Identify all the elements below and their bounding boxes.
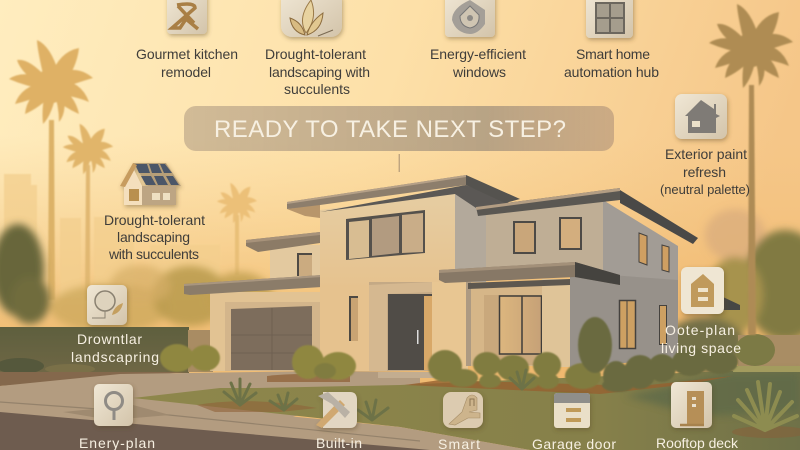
garage wing xyxy=(184,232,336,371)
right palm tree xyxy=(709,4,793,335)
background trees xyxy=(0,209,800,373)
icon: tan house xyxy=(681,267,724,314)
item: built-in xyxy=(316,392,362,450)
upper roof xyxy=(287,175,520,218)
item: open-plan living space: living space xyxy=(661,340,741,356)
agave plants xyxy=(224,370,797,430)
item: solar house landscaping: Drought-tolerant xyxy=(104,212,205,228)
item: rooftop deck xyxy=(656,382,739,450)
item: gourmet kitchen remodel xyxy=(136,0,238,80)
item: energy-efficient windows xyxy=(430,0,526,80)
item: gourmet kitchen remodel: remodel xyxy=(161,64,211,80)
hedge xyxy=(0,327,800,386)
item: smart home automation hub: Smart home xyxy=(576,46,650,62)
item: droughtlar landscaping xyxy=(71,285,159,365)
item: droughtlar landscaping: Drowntlar xyxy=(77,331,142,347)
icon: grey house xyxy=(675,94,727,139)
item: garage door xyxy=(532,393,616,450)
item: drought-tolerant landscaping: landscaping with xyxy=(269,64,370,80)
right wing roof xyxy=(476,188,698,244)
icon: window xyxy=(586,0,633,38)
icon: circle and leaf xyxy=(87,285,127,325)
icon: succulent leaves xyxy=(281,0,342,37)
wing windows xyxy=(513,217,669,348)
item: smart home automation hub xyxy=(564,0,659,80)
icon: door xyxy=(671,382,712,428)
title banner: READY TO TAKE NEXT STEP? xyxy=(214,116,566,143)
item: solar house landscaping xyxy=(104,163,205,262)
icon: kitchen xyxy=(167,0,207,34)
item: exterior paint refresh: (neutral palette) xyxy=(660,182,750,197)
title banner xyxy=(184,106,614,151)
icon: hammer xyxy=(316,392,357,428)
item: solar house landscaping: with succulents xyxy=(108,246,199,262)
palm trees left xyxy=(9,40,257,300)
item: energy-efficient windows: Energy-efficient xyxy=(430,46,526,62)
item: exterior paint refresh xyxy=(660,94,750,197)
item: gourmet kitchen remodel: Gourmet kitchen xyxy=(136,46,238,62)
item: exterior paint refresh: refresh xyxy=(683,164,726,180)
icon: grey droplet ring xyxy=(445,0,495,37)
small rear roof xyxy=(723,297,740,310)
upper large window xyxy=(346,210,425,260)
banner pointer xyxy=(399,154,400,172)
entry and front door xyxy=(369,282,468,378)
ground: driveway, lawn, sidewalk and road xyxy=(0,366,800,450)
porch with window xyxy=(439,262,620,367)
item: droughtlar landscaping: landscapring xyxy=(71,349,159,365)
item: energy-efficient windows: windows xyxy=(452,64,506,80)
item: solar house landscaping: landscaping xyxy=(117,229,190,245)
item: drought-tolerant landscaping: Drought-tolerant xyxy=(265,46,366,62)
item: smart home automation hub: automation hub xyxy=(564,64,659,80)
icon: key xyxy=(443,392,483,428)
item: enery-plan xyxy=(79,384,155,450)
icon: magnifier xyxy=(94,384,133,426)
item: open-plan living space xyxy=(661,267,741,356)
item: exterior paint refresh: Exterior paint xyxy=(665,146,747,162)
skyline silhouettes xyxy=(4,174,220,298)
main block xyxy=(320,193,678,371)
shrubs xyxy=(160,317,738,392)
item: open-plan living space: Oote-plan xyxy=(665,322,735,338)
house xyxy=(184,175,740,378)
icon: solar roof house xyxy=(120,163,181,205)
icon: garage door panel xyxy=(554,393,590,428)
item: drought-tolerant landscaping: succulents xyxy=(284,81,350,97)
item: drought-tolerant landscaping xyxy=(265,0,370,97)
item: smart key xyxy=(438,392,483,450)
